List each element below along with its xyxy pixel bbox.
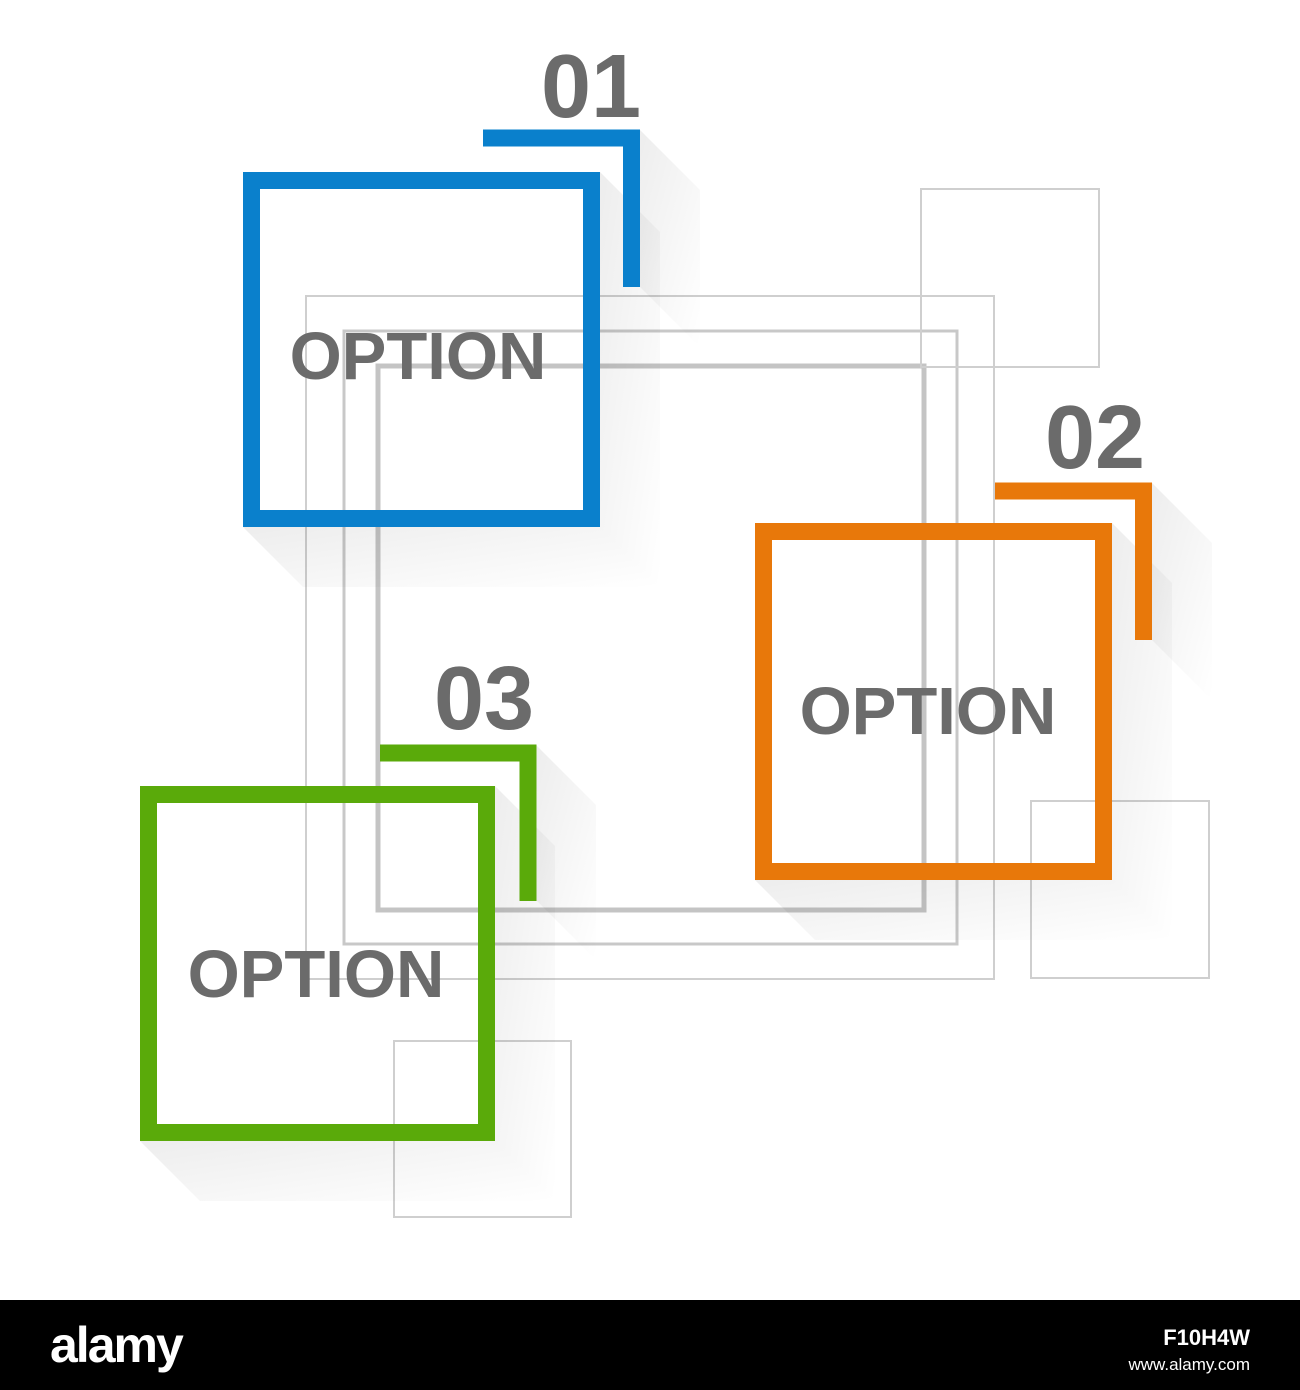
footer bar: www.alamy.com xyxy=(1127,1355,1250,1374)
number 02: 02 xyxy=(1045,388,1145,488)
bracket 02 xyxy=(995,491,1144,640)
label option 01: OPTION xyxy=(290,319,546,394)
bracket 03 xyxy=(380,753,528,901)
panel: option 03 (green) xyxy=(148,649,534,1132)
panel: option 01 (blue) xyxy=(252,37,641,518)
footer id text: F10H4W xyxy=(1163,1325,1250,1350)
background frames: gray nested rectangles xyxy=(306,189,1209,1217)
label option 03: OPTION xyxy=(188,937,444,1012)
bracket 01 xyxy=(483,138,632,287)
number 01: 01 xyxy=(541,37,641,137)
label option 02: OPTION xyxy=(800,674,1056,749)
footer brand text: alamy xyxy=(50,1317,184,1373)
panel: option 02 (orange) xyxy=(764,388,1145,872)
number 03: 03 xyxy=(434,649,534,749)
shadows xyxy=(140,130,1212,1201)
footer bar xyxy=(0,1300,1300,1390)
